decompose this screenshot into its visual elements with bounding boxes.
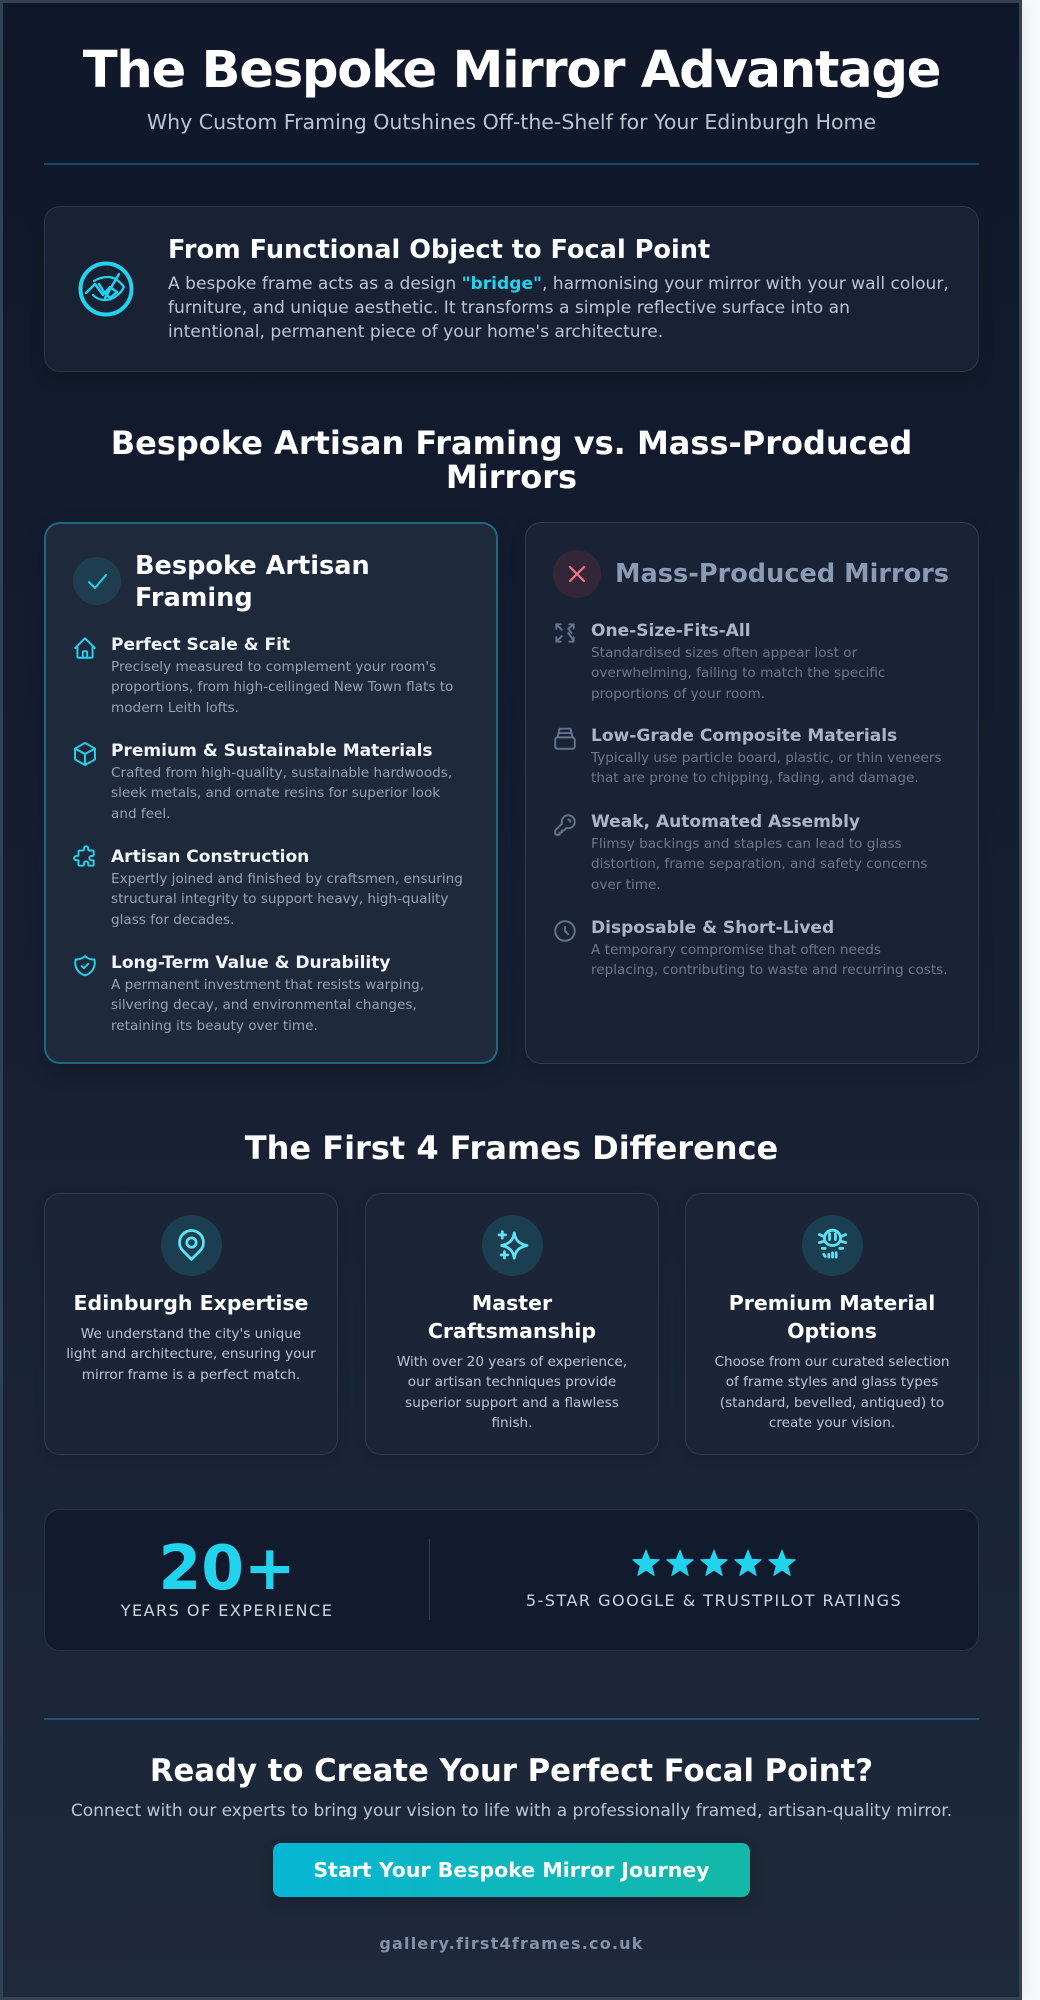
item description: [591, 750, 942, 786]
panel heading: [135, 551, 370, 613]
icon: eye in circle: [78, 262, 134, 316]
call to action text: Connect with our experts to bring your vision to life with a professionally framed, artisan-quality mirror.: [71, 1801, 952, 1821]
card text: create your vision.: [769, 1415, 895, 1431]
item description: glass for decades.: [111, 912, 234, 928]
item description: silvering decay, and environmental changes,: [111, 997, 417, 1013]
footer url: gallery.first4frames.co.uk: [379, 1934, 644, 1953]
card text: our artisan techniques provide: [408, 1374, 616, 1390]
item title: One-Size-Fits-All: [591, 621, 751, 641]
body text: furniture, and unique aesthetic. It transforms a simple reflective surface into an: [168, 298, 850, 318]
card title: [428, 1291, 596, 1343]
item description: and feel.: [111, 806, 171, 822]
item: perfect scale: [74, 635, 453, 716]
item description: Typically use particle board, plastic, or thin veneers: [591, 750, 942, 766]
item description: proportions of your room.: [591, 686, 765, 702]
card text: With over 20 years of experience,: [397, 1354, 627, 1370]
card text: We understand the city's unique: [81, 1326, 301, 1342]
item description: Precisely measured to complement your room's: [111, 659, 436, 675]
item description: Flimsy backings and staples can lead to glass: [591, 836, 902, 852]
item: long-term value: [74, 953, 424, 1034]
icon: sparkles: [482, 1215, 542, 1276]
item description: structural integrity to support heavy, high-quality: [111, 891, 448, 907]
item description: [111, 871, 463, 928]
item: disposable: [554, 918, 948, 978]
item description: [111, 765, 452, 822]
card text: [397, 1354, 627, 1431]
item description: [591, 836, 928, 893]
icon: cross badge: [553, 550, 601, 598]
item description: Crafted from high-quality, sustainable hardwoods,: [111, 765, 452, 781]
item description: replacing, contributing to waste and recurring costs.: [591, 962, 948, 978]
body text: A bespoke frame acts as a design "bridge", harmonising your mirror with your wall colour,: [168, 274, 949, 294]
subtitle: Why Custom Framing Outshines Off-the-Shelf for Your Edinburgh Home: [147, 110, 876, 134]
item description: distortion, frame separation, and safety concerns: [591, 856, 928, 872]
card text: [66, 1326, 316, 1383]
item: one size: [555, 621, 885, 702]
body text: intentional, permanent piece of your home's architecture.: [168, 322, 663, 342]
panel heading: Bespoke Artisan: [135, 551, 370, 581]
panel: mass-produced mirrors: [525, 522, 979, 1064]
icon: material swatch: [802, 1215, 862, 1276]
section heading: comparison: Bespoke Artisan Framing vs. Mass-Produced: [111, 424, 912, 462]
card text: Choose from our curated selection: [714, 1354, 950, 1370]
section heading: comparison: Mirrors: [446, 458, 577, 496]
heading: From Functional Object to Focal Point: [168, 235, 710, 265]
item description: [591, 645, 885, 702]
icon: clock: [554, 920, 576, 942]
icon: puzzle: [73, 845, 95, 867]
item: low-grade materials: [554, 726, 942, 786]
item description: over time.: [591, 877, 661, 893]
section heading: comparison: [111, 424, 912, 496]
item description: [591, 942, 948, 978]
panel: focal point intro: [44, 206, 979, 372]
icon: shield check: [74, 955, 96, 976]
icon: expand arrows: [555, 623, 575, 643]
panel: stats: [44, 1509, 979, 1651]
card text: of frame styles and glass types: [726, 1374, 938, 1390]
icon: cube: [74, 742, 96, 766]
panel: Edinburgh expertise: [44, 1193, 338, 1455]
card text: mirror frame is a perfect match.: [82, 1367, 300, 1383]
call to action heading: Ready to Create Your Perfect Focal Point?: [150, 1754, 873, 1789]
item title: Perfect Scale & Fit: [111, 635, 290, 655]
item title: Premium & Sustainable Materials: [111, 741, 433, 761]
item description: overwhelming, failing to match the specific: [591, 665, 885, 681]
stat label: YEARS OF EXPERIENCE: [121, 1601, 333, 1620]
icon: five stars: [632, 1550, 796, 1576]
body text: [168, 274, 949, 342]
panel: master craftsmanship: [365, 1193, 659, 1455]
item description: A temporary compromise that often needs: [591, 942, 881, 958]
item title: Weak, Automated Assembly: [591, 812, 860, 832]
item title: Artisan Construction: [111, 847, 309, 867]
icon: location pin: [160, 1215, 222, 1276]
item description: Standardised sizes often appear lost or: [591, 645, 857, 661]
card title: Craftsmanship: [428, 1319, 596, 1343]
card text: light and architecture, ensuring your: [66, 1346, 316, 1362]
panel heading: Framing: [135, 583, 253, 613]
item description: modern Leith lofts.: [111, 700, 239, 716]
card title: Premium Material: [729, 1291, 935, 1315]
card text: superior support and a flawless: [405, 1395, 619, 1411]
item description: that are prone to chipping, fading, and damage.: [591, 770, 919, 786]
title: The Bespoke Mirror Advantage: [83, 40, 940, 100]
card title: Master: [472, 1291, 552, 1315]
item description: retaining its beauty over time.: [111, 1018, 318, 1034]
item title: Long-Term Value & Durability: [111, 953, 390, 973]
button: Start Your Bespoke Mirror Journey: [313, 1858, 710, 1882]
card text: finish.: [492, 1415, 532, 1431]
card text: [714, 1354, 950, 1431]
item description: [111, 659, 453, 716]
card text: (standard, bevelled, antiqued) to: [720, 1395, 944, 1411]
panel: premium material options: [685, 1193, 979, 1455]
item description: proportions, from high-ceilinged New Town flats to: [111, 679, 453, 695]
item description: Expertly joined and finished by craftsmen, ensuring: [111, 871, 463, 887]
panel: bespoke artisan framing: [44, 522, 498, 1064]
card title: [729, 1291, 935, 1343]
icon: key: [554, 814, 576, 836]
section heading: difference: The First 4 Frames Difference: [245, 1129, 778, 1167]
icon: stacked board: [554, 728, 576, 750]
ratings label: 5-STAR GOOGLE & TRUSTPILOT RATINGS: [526, 1591, 902, 1610]
item: artisan construction: [73, 845, 463, 928]
button: [273, 1843, 750, 1897]
card title: Edinburgh Expertise: [74, 1291, 308, 1315]
panel heading: Mass-Produced Mirrors: [615, 559, 949, 589]
stat number: 20+: [158, 1532, 296, 1604]
item title: Disposable & Short-Lived: [591, 918, 834, 938]
card title: Options: [787, 1319, 877, 1343]
item: premium materials: [74, 741, 452, 822]
item description: sleek metals, and ornate resins for superior look: [111, 785, 440, 801]
item title: Low-Grade Composite Materials: [591, 726, 897, 746]
item: weak assembly: [554, 812, 928, 893]
item description: [111, 977, 424, 1034]
icon: check badge: [73, 557, 121, 605]
item description: A permanent investment that resists warping,: [111, 977, 424, 993]
icon: house: [74, 637, 96, 659]
